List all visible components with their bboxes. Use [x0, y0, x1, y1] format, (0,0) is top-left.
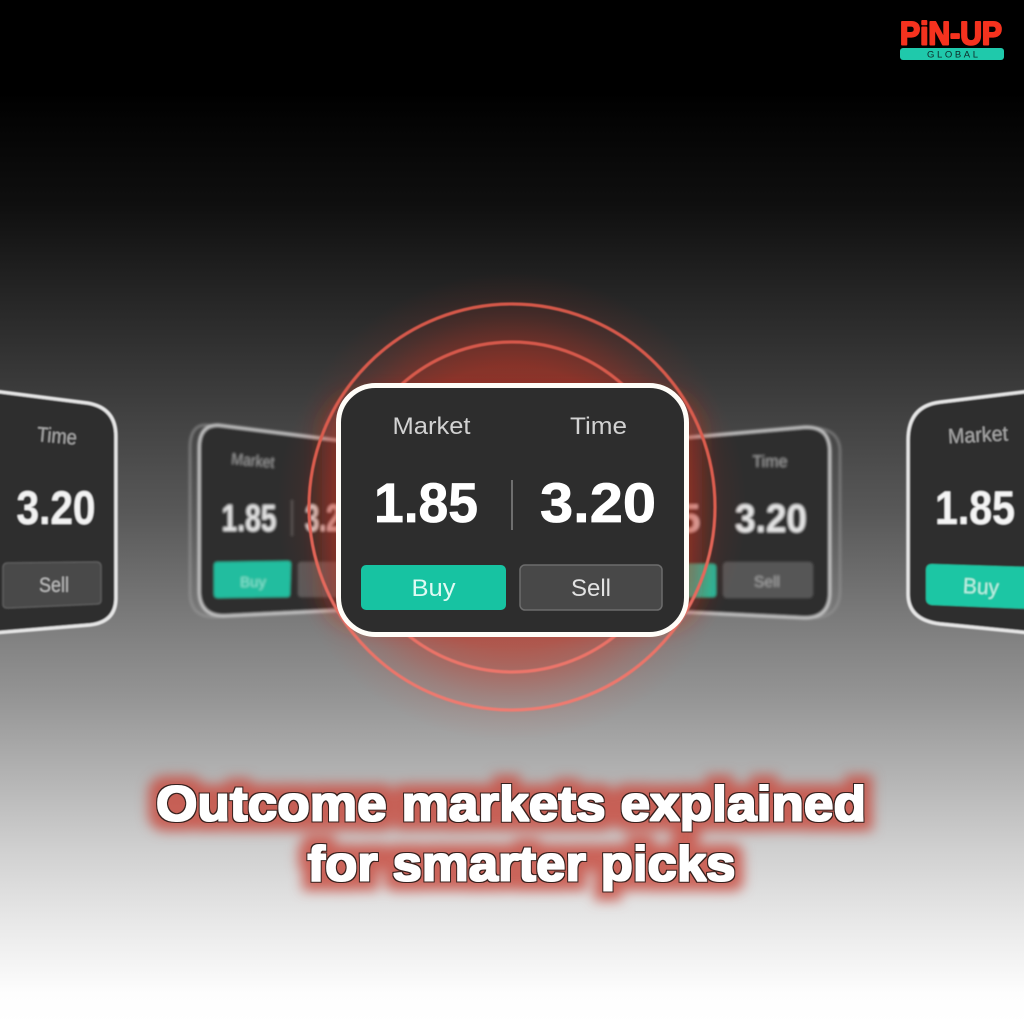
panel: far left card: Time [36, 423, 78, 450]
outer red ring [309, 304, 715, 710]
button: Buy: Buy [412, 575, 456, 602]
label: Market: Market [392, 413, 471, 440]
button: Sell: Sell [571, 575, 611, 602]
red glow around card [322, 392, 702, 628]
inner red ring [347, 342, 677, 672]
logo: Pin-Up Global: PiN-UP [900, 16, 1002, 52]
panel: far right card [908, 391, 1024, 633]
red radial glow [277, 272, 747, 742]
title: for smarter picks [308, 838, 736, 892]
panel: central market card [338, 386, 686, 634]
panel: middle left card: 1.85 [222, 498, 276, 540]
panel: middle right card [678, 427, 840, 618]
button: Buy [361, 565, 506, 610]
panel: far left card: Sell [39, 574, 69, 597]
panel: middle left card: 3.20 [305, 498, 355, 540]
panel: middle left card [190, 425, 355, 617]
button: Sell [520, 565, 662, 610]
panel: middle left card: Buy [240, 574, 266, 591]
panel: middle right card: Time [752, 452, 788, 471]
title: Outcome markets explained [156, 778, 866, 832]
panel: far right card: Market [947, 422, 1009, 449]
panel: middle right card: Sell [754, 574, 780, 591]
title [156, 778, 866, 892]
panel: middle right card: 3.20 [735, 497, 807, 541]
label: Time: Time [570, 413, 627, 440]
logo: Pin-Up Global: GLOBAL [927, 50, 978, 60]
panel: far right card: 1.85 [935, 481, 1015, 534]
panel: far left card: 3.20 [16, 481, 96, 534]
panel: far left card [0, 391, 116, 633]
panel: far right card: Buy [962, 573, 1000, 600]
odds value: 1.85: 1.85 [374, 471, 478, 534]
odds value: 3.20: 3.20 [540, 471, 656, 534]
panel: middle right card: 5 [678, 497, 700, 541]
panel: middle left card: Market [231, 451, 276, 472]
